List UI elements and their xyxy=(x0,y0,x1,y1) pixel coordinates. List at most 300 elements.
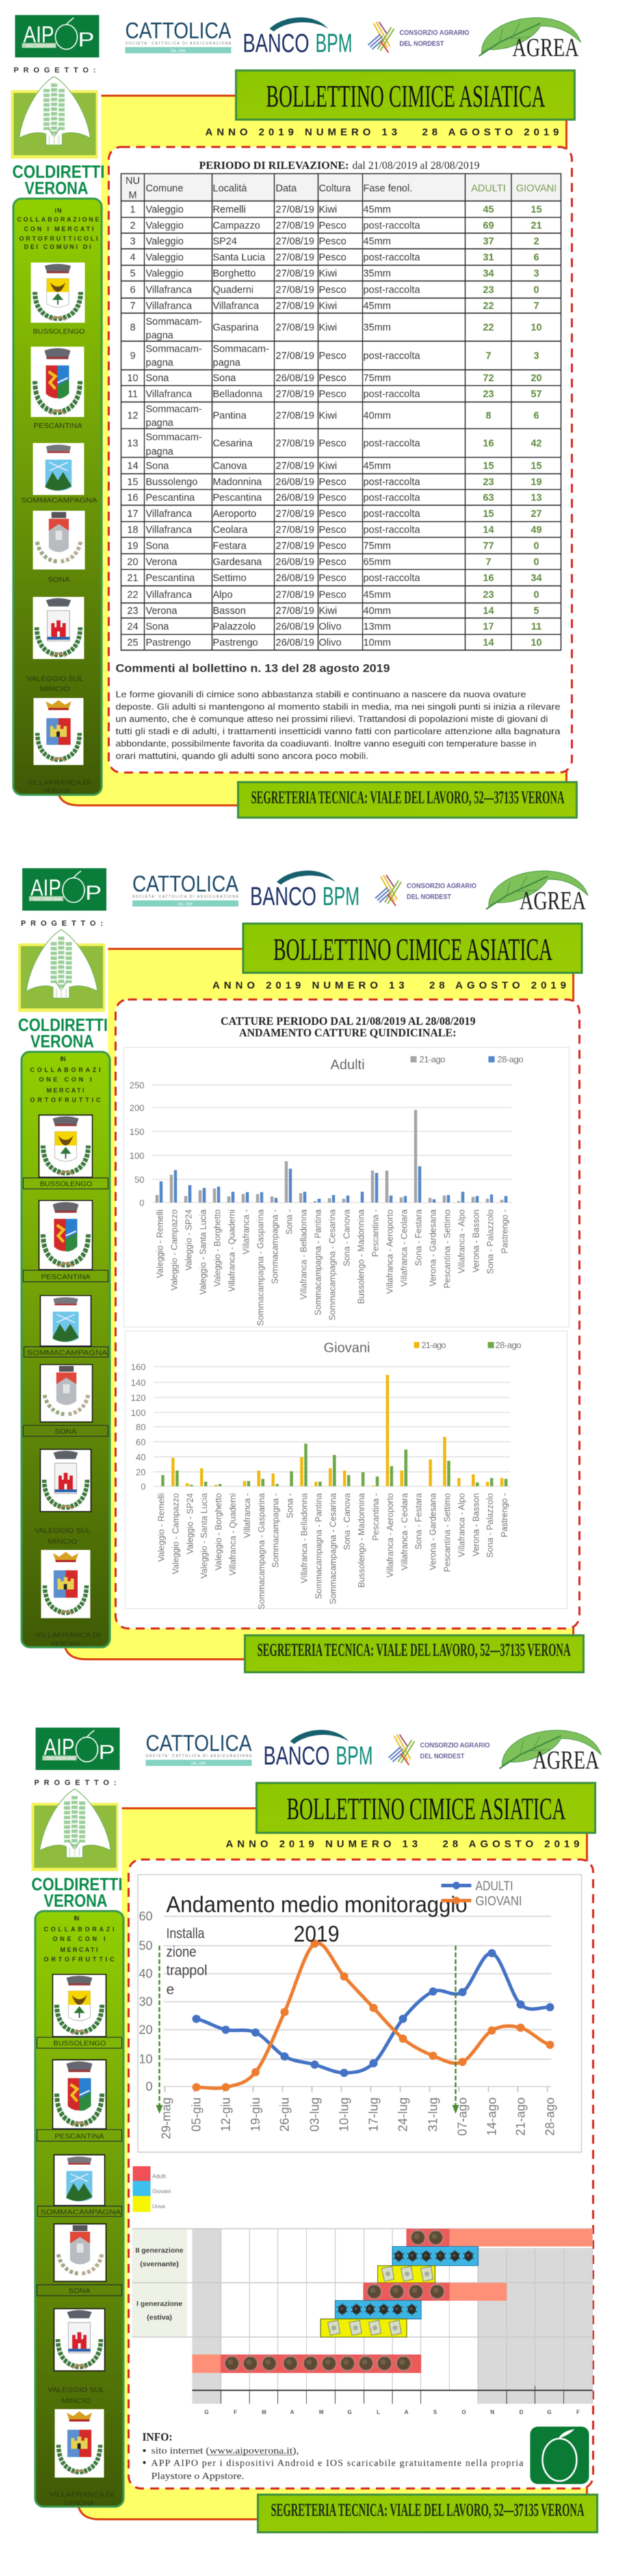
table: monitoring data: Valeggio xyxy=(146,237,183,247)
logo: Consorzio Agrario del Nordest: CONSORZIO AGRARIO xyxy=(400,29,469,37)
logo: Consorzio Agrario del Nordest xyxy=(389,1734,490,1765)
table: monitoring data: Basson xyxy=(213,606,246,617)
sidebar: municipalities: MERCATI xyxy=(60,1946,98,1953)
logo: Agrea: AGREA xyxy=(512,33,579,62)
axis: months: F xyxy=(234,2409,237,2415)
crest: Sona xyxy=(40,1365,92,1422)
table: monitoring data: pagna xyxy=(146,446,174,457)
heading: Coldiretti Verona: VERONA xyxy=(25,178,88,198)
table: monitoring data: 27/08/19 xyxy=(276,323,314,334)
table: monitoring data: 27/08/19 xyxy=(276,525,314,536)
table: monitoring data: Sommacam- xyxy=(213,344,269,355)
logo: AIPO: AIP xyxy=(44,1734,75,1760)
table: monitoring data: 27/08/19 xyxy=(276,351,314,362)
bar chart: adulti: 200 xyxy=(129,1103,144,1113)
label: Villafranca di Verona xyxy=(36,1632,101,1648)
crest: Bussolengo xyxy=(39,1115,92,1177)
bar chart: adulti: Villafranca - Ceolara xyxy=(400,1209,409,1287)
crest: Valeggio sul Mincio xyxy=(33,597,84,659)
table: monitoring data: Ceolara xyxy=(213,525,248,536)
table: monitoring data: 15 xyxy=(127,477,138,488)
panel: yellow background with red border xyxy=(79,1808,587,2519)
table: monitoring data: 27/08/19 xyxy=(276,237,314,247)
table: monitoring data: Alpo xyxy=(213,589,233,600)
table: monitoring data: 16 xyxy=(127,492,138,503)
table: monitoring data: Villafranca xyxy=(146,284,192,295)
table: monitoring data: M xyxy=(129,190,137,201)
label: Sona: SONA xyxy=(68,2287,90,2295)
table: monitoring data: Pesco xyxy=(319,373,346,384)
table heading: dal 21/08/2019 al 28/08/2019 xyxy=(352,160,480,172)
table: monitoring data: 45mm xyxy=(363,301,391,312)
table: monitoring data: 10 xyxy=(127,373,138,384)
table: monitoring data: 26/08/19 xyxy=(276,556,314,567)
title banner xyxy=(236,70,575,120)
table: monitoring data: 27/08/19 xyxy=(276,438,314,449)
annotation: installazione trappole: e xyxy=(166,1982,174,1998)
table: monitoring data: 19 xyxy=(127,541,138,552)
table: monitoring data: 27/08/19 xyxy=(276,606,314,617)
table: monitoring data: Aeroporto xyxy=(213,509,257,520)
table: monitoring data: Kiwi xyxy=(319,410,337,421)
table heading: PERIODO DI RILEVAZIONE: xyxy=(199,160,349,172)
bar chart: giovani: Valeggio - SP24 xyxy=(185,1493,195,1554)
table: monitoring data: 10mm xyxy=(363,637,391,648)
table: monitoring data: 0 xyxy=(534,541,539,552)
label: Sommacampagna xyxy=(24,1347,108,1357)
bar chart: giovani: Verona - Basson xyxy=(471,1493,481,1556)
table: monitoring data: Sona xyxy=(146,461,170,472)
table: monitoring data: 22 xyxy=(483,323,494,334)
table: monitoring data: Kiwi xyxy=(319,268,337,279)
table: monitoring data: post-raccolta xyxy=(363,525,421,536)
label: Villafranca di Verona: VILLAFRANCA DI xyxy=(36,1632,101,1639)
label: Bussolengo: BUSSOLENGO xyxy=(33,328,85,336)
bar chart: adulti: Sommacampagna - xyxy=(270,1209,280,1284)
title banner xyxy=(257,1783,595,1833)
table: monitoring data: post-raccolta xyxy=(363,389,421,400)
bar chart: adulti: Bussolengo - Madonnina xyxy=(356,1209,366,1304)
bar chart: adulti: Villafranca - Alpo xyxy=(457,1209,467,1274)
annotation: installazione trappole: zione xyxy=(166,1944,196,1960)
legend: life stages: Giovani xyxy=(152,2188,171,2195)
heading: Coldiretti Verona: VERONA xyxy=(30,1031,94,1051)
table: monitoring data: 27/08/19 xyxy=(276,284,314,295)
legend: adulti xyxy=(410,1054,523,1064)
sidebar: municipalities: ORTOFRUTTICOLI xyxy=(19,235,98,242)
comments text: un aumento, che è comunque atteso nei prossimi rilievi. Trattandosi di popolazioni miste di giovani di xyxy=(116,714,548,724)
label: Villafranca di Verona xyxy=(49,2491,114,2508)
table: monitoring data: Pesco xyxy=(319,284,346,295)
table: monitoring data: 26/08/19 xyxy=(276,477,314,488)
crest: Pescantina xyxy=(39,1200,92,1270)
table: monitoring data: Sommacam- xyxy=(146,404,202,415)
legend: giovani: 21-ago xyxy=(421,1340,446,1350)
bar chart: adulti: Sommacampagna - Pantina xyxy=(313,1209,323,1315)
info block: Playstore o Appstore. xyxy=(151,2471,244,2482)
logo: Agrea xyxy=(499,1730,601,1775)
bar chart: adulti: Villafranca - Aeroporto xyxy=(385,1209,395,1293)
crest: Pescantina xyxy=(53,2060,106,2129)
logo: Banco BPM: BPM xyxy=(323,883,360,911)
axis: months: D xyxy=(519,2409,523,2415)
label: Bussolengo xyxy=(23,1178,108,1189)
comments text: Le forme giovanili di cimice sono abbastanza stabili e continuano a nascere da nuova ovature xyxy=(116,689,526,699)
bar chart: giovani: 40 xyxy=(136,1452,146,1462)
bar chart: adulti: Sona - Canova xyxy=(342,1209,352,1266)
table: monitoring data: 9 xyxy=(130,351,135,362)
table: monitoring data: 35mm xyxy=(363,323,391,334)
table: monitoring data: Madonnina xyxy=(213,477,263,488)
bar chart: giovani: Sommacampagna - xyxy=(271,1493,280,1568)
table: monitoring data: 42 xyxy=(531,438,542,449)
heading: Coldiretti Verona xyxy=(12,161,105,198)
table: monitoring data: 6 xyxy=(534,410,539,421)
sidebar: municipalities: COLLABORAZIONE xyxy=(17,216,99,223)
row label: I generazione xyxy=(136,2300,183,2322)
table: monitoring data: Pesco xyxy=(319,477,346,488)
sidebar: municipalities: IN xyxy=(74,1915,79,1922)
bar chart: adulti: Pescantina - xyxy=(371,1209,380,1257)
header: logos, title and issue line xyxy=(11,15,581,198)
row label: II generazione: (svernante) xyxy=(140,2260,179,2268)
bar chart: giovani: 120 xyxy=(131,1393,146,1403)
bar chart: adulti: Sona - Palazzolo xyxy=(486,1209,495,1274)
bar chart: giovani: Villafranca - Belladonna xyxy=(300,1493,309,1583)
panel: white dashed box xyxy=(129,1860,593,2488)
logo: AIPO fruit mark xyxy=(530,2427,589,2484)
logo: AIPO: AIP xyxy=(30,875,62,901)
row label: II generazione: II generazione xyxy=(135,2246,183,2255)
table: monitoring data xyxy=(121,174,561,650)
line chart: average monitoring trend xyxy=(138,1875,581,2152)
table: monitoring data: Bussolengo xyxy=(146,477,198,488)
line chart: average monitoring trend: 14-ago xyxy=(485,2097,499,2136)
table: monitoring data: 72 xyxy=(483,373,494,384)
table: monitoring data: Pesco xyxy=(319,237,346,247)
line chart: average monitoring trend: 21-ago xyxy=(514,2097,527,2136)
comments text: deposte. Gli adulti si mantengono al momento stabili in media, ma nei singoli punti si inizia a rilevare xyxy=(116,701,560,712)
table: monitoring data: 3 xyxy=(534,268,539,279)
logo: Agrea: AGREA xyxy=(520,887,586,915)
logo: Cattolica: CATTOLICA xyxy=(146,1730,252,1756)
table: monitoring data: Verona xyxy=(146,556,178,567)
table: monitoring data: Pesco xyxy=(319,438,346,449)
line chart: average monitoring trend: 30 xyxy=(139,1995,153,2009)
bars: I generazione eggs xyxy=(321,2319,407,2337)
axis: months: A xyxy=(290,2409,294,2415)
bar chart: giovani: Sommacampagna - Pantina xyxy=(314,1493,324,1599)
table: monitoring data: 14 xyxy=(127,461,138,472)
logo: Cattolica: SOCIETA' CATTOLICA DI ASSICURAZIONE xyxy=(125,42,232,46)
table: monitoring data: 15 xyxy=(531,204,542,215)
bars: I generazione adults xyxy=(363,2283,507,2300)
table: monitoring data: Fase fenol. xyxy=(363,183,413,194)
table: monitoring data: Villafranca xyxy=(146,589,192,600)
bar chart: adulti: Sommacampagna - Cesarina xyxy=(328,1209,337,1321)
sidebar: municipalities: COLLABORAZI xyxy=(30,1066,101,1073)
logo: Banco BPM xyxy=(243,17,352,58)
logo: Consorzio Agrario del Nordest: CONSORZIO AGRARIO xyxy=(420,1742,490,1749)
table: monitoring data: NU xyxy=(126,176,140,187)
charts heading: ANDAMENTO CATTURE QUINDICINALE: xyxy=(239,1026,456,1039)
logo: Cattolica: CATTOLICA xyxy=(133,871,238,896)
bar chart: giovani: Bussolengo - Madonnina xyxy=(357,1493,367,1587)
table: monitoring data: Quaderni xyxy=(213,284,254,295)
bar chart: adulti: Villafranca - xyxy=(241,1209,251,1255)
bars: overwintering adults xyxy=(192,2354,421,2373)
logo: AIPO: SOC. COOP. AGR. xyxy=(47,1757,75,1761)
table: monitoring data: 31 xyxy=(483,252,494,263)
table: monitoring data: 45mm xyxy=(363,461,391,472)
logo: AIPO: AIP xyxy=(23,22,54,48)
logo: Banco BPM: BPM xyxy=(336,1742,373,1771)
chart title: Andamento medio monitoraggio xyxy=(166,1892,467,1917)
axis: months xyxy=(205,2409,580,2415)
table: monitoring data: Pesco xyxy=(319,389,346,400)
table: monitoring data: Sommacam- xyxy=(146,317,202,327)
table: monitoring data: 4 xyxy=(130,252,135,263)
bar chart: giovani: Valeggio - Borghetto xyxy=(214,1493,224,1570)
table: monitoring data: Remelli xyxy=(213,204,246,215)
table: monitoring data: Pesco xyxy=(319,573,346,584)
table: monitoring data: Data xyxy=(276,183,298,194)
title banner xyxy=(244,924,581,973)
emblem: Coldiretti xyxy=(18,930,105,1012)
table: monitoring data: 26/08/19 xyxy=(276,573,314,584)
table: monitoring data: 6 xyxy=(130,284,135,295)
table: monitoring data: Pesco xyxy=(319,351,346,362)
logo: AIPO: SOC. COOP. AGR. xyxy=(26,44,55,49)
sidebar: municipalities: ORTOFRUTTIC xyxy=(44,1956,115,1963)
label: Pescantina: PESCANTINA xyxy=(55,2133,104,2141)
row label: I generazione: I generazione xyxy=(136,2300,183,2308)
panel: white dashed box xyxy=(109,147,572,773)
label: progetto: PROGETTO: xyxy=(14,66,96,75)
table: monitoring data: 27/08/19 xyxy=(276,589,314,600)
table: monitoring data: 63 xyxy=(483,492,494,503)
legend: adulti and giovani xyxy=(441,1879,522,1909)
panel: yellow background with red border xyxy=(58,96,566,805)
table: monitoring data: 11 xyxy=(127,389,138,400)
section 1: bulletin table page xyxy=(11,15,581,818)
bar chart: giovani: 160 xyxy=(131,1362,146,1372)
table: monitoring data: Pesco xyxy=(319,525,346,536)
table: monitoring data: 26/08/19 xyxy=(276,492,314,503)
table: monitoring data: ADULTI xyxy=(471,183,506,194)
table: monitoring data: Kiwi xyxy=(319,301,337,312)
table: monitoring data: 21 xyxy=(127,573,138,584)
table: monitoring data: Villafranca xyxy=(146,525,192,536)
crest: Bussolengo xyxy=(53,1974,106,2037)
logo: Agrea: AGREA xyxy=(533,1746,599,1775)
table: monitoring data: 27/08/19 xyxy=(276,410,314,421)
table: monitoring data: 69 xyxy=(483,220,494,231)
table: monitoring data: 2 xyxy=(130,220,135,231)
gantt chart: life cycle by generation xyxy=(132,2229,592,2415)
logo: AIPO xyxy=(15,15,99,57)
info block xyxy=(142,2430,524,2482)
table: monitoring data: Gasparina xyxy=(213,323,259,334)
table: monitoring data: 77 xyxy=(483,541,494,552)
table: monitoring data: Sommacam- xyxy=(146,344,202,355)
line chart: average monitoring trend: 0 xyxy=(146,2080,153,2093)
sidebar: municipalities: IN xyxy=(55,207,62,214)
table: monitoring data: Comune xyxy=(146,183,183,194)
bar chart: adulti: Valeggio - Santa Lucia xyxy=(198,1209,208,1295)
bars: II generazione adults xyxy=(406,2229,592,2246)
table: monitoring data: Pescantina xyxy=(213,492,263,503)
label: Sommacampagna xyxy=(38,2206,122,2216)
sidebar: municipalities: MERCATI xyxy=(47,1087,84,1094)
comments text xyxy=(116,689,561,761)
line chart: average monitoring trend: 60 xyxy=(139,1909,153,1923)
table: monitoring data: 10 xyxy=(531,637,542,648)
table: monitoring data: 27/08/19 xyxy=(276,541,314,552)
issue line: ANNO 2019 NUMERO 13 28 AGOSTO 2019 xyxy=(212,980,566,991)
axis: months: O xyxy=(462,2409,466,2415)
bar chart: adulti: Valeggio - Campazzo xyxy=(170,1209,179,1291)
table: monitoring data: 25 xyxy=(127,637,138,648)
table: monitoring data: Kiwi xyxy=(319,204,337,215)
bar chart: adulti: Valeggio - Borghetto xyxy=(213,1209,222,1287)
legend: adulti and giovani: ADULTI xyxy=(475,1879,513,1894)
table: monitoring data: 23 xyxy=(483,284,494,295)
table: monitoring data: Kiwi xyxy=(319,461,337,472)
table: monitoring data: 20 xyxy=(531,373,542,384)
table: monitoring data: Sona xyxy=(146,621,170,632)
sidebar: municipalities: DEI COMUNI DI xyxy=(24,243,91,250)
bar chart: adulti: Sommacampagna - Gasparina xyxy=(256,1209,265,1326)
axis: months: M xyxy=(262,2409,267,2415)
logo: Consorzio Agrario del Nordest: DEL NORDEST xyxy=(400,40,444,48)
table: monitoring data: Olivo xyxy=(319,637,341,648)
comments text: tutti gli stadi e di adulti, i trattamenti insetticidi vanno fatti con particolare attenzione alla bagnatura xyxy=(116,726,561,736)
table: monitoring data: 17 xyxy=(127,509,138,520)
table: monitoring data: 57 xyxy=(531,389,542,400)
table: monitoring data: 26/08/19 xyxy=(276,373,314,384)
table: monitoring data: 34 xyxy=(483,268,494,279)
legend: adulti and giovani: GIOVANI xyxy=(475,1894,522,1909)
comments heading: Commenti al bollettino n. 13 del 28 agosto 2019 xyxy=(116,662,390,675)
header: logos, title and issue line xyxy=(18,868,588,1051)
table: monitoring data: 5 xyxy=(130,268,135,279)
label: progetto: PROGETTO: xyxy=(34,1779,116,1787)
bar chart: adulti: Sona - xyxy=(285,1209,294,1235)
logo: AIPO: P xyxy=(99,1741,115,1764)
table: monitoring data: 75mm xyxy=(363,373,391,384)
table: monitoring data: Palazzolo xyxy=(213,621,256,632)
table: monitoring data: pagna xyxy=(146,358,174,368)
table: monitoring data: Pastrengo xyxy=(146,637,191,648)
table: monitoring data: 26/08/19 xyxy=(276,621,314,632)
crest: Bussolengo xyxy=(31,263,85,323)
table: monitoring data: Cesarina xyxy=(213,438,253,449)
table: monitoring data: 27/08/19 xyxy=(276,220,314,231)
bar chart: giovani: Villafranca - Alpo xyxy=(457,1493,467,1557)
sidebar: municipalities xyxy=(36,1911,123,2508)
table: monitoring data: 8 xyxy=(130,323,135,334)
table: monitoring data: Olivo xyxy=(319,621,341,632)
logo: AIPO: P xyxy=(85,882,101,904)
table: monitoring data: Pastrengo xyxy=(213,637,258,648)
table: monitoring data: Villafranca xyxy=(146,509,192,520)
label: Valeggio sul Mincio: MINCIO xyxy=(48,1538,77,1546)
table: monitoring data: Belladonna xyxy=(213,389,263,400)
table: monitoring data: Sommacam- xyxy=(146,432,202,443)
bar chart: adulti: Valeggio - Remelli xyxy=(155,1209,165,1278)
table: monitoring data: Pantina xyxy=(213,410,247,421)
table: monitoring data: Gardesana xyxy=(213,556,263,567)
crest: Villafranca di Verona xyxy=(34,698,83,765)
bar chart: giovani: Valeggio - Remelli xyxy=(157,1493,166,1562)
axis: months: L xyxy=(377,2409,380,2415)
bar chart: adulti: Pastrengo - xyxy=(500,1209,510,1254)
label: Valeggio sul Mincio xyxy=(34,1527,91,1546)
header: logos, title and issue line xyxy=(31,1728,601,1911)
table: monitoring data: Villafranca xyxy=(213,301,259,312)
table: monitoring data: post-raccolta xyxy=(363,438,421,449)
label: Valeggio sul Mincio: MINCIO xyxy=(62,2398,91,2405)
charts heading: CATTURE PERIODO DAL 21/08/2019 AL 28/08/2019 xyxy=(220,1015,475,1028)
emblem: Coldiretti xyxy=(11,77,98,159)
bar chart: giovani: Villafranca - Aeroporto xyxy=(385,1493,395,1577)
table: monitoring data: Località xyxy=(213,183,248,194)
table: monitoring data: Valeggio xyxy=(146,220,183,231)
bar chart: giovani: Sona - Canova xyxy=(343,1493,352,1550)
bar chart: giovani: 0 xyxy=(141,1481,146,1492)
table: monitoring data: post-raccolta xyxy=(363,252,421,263)
table: monitoring data: 7 xyxy=(486,556,491,567)
table: monitoring data: Pescantina xyxy=(146,492,196,503)
table: monitoring data: Pesco xyxy=(319,509,346,520)
line chart: average monitoring trend: 03-lug xyxy=(308,2097,322,2132)
crest: Valeggio sul Mincio xyxy=(40,1449,91,1512)
table: monitoring data: 0 xyxy=(534,284,539,295)
label: Sommacampagna: SOMMACAMPAGNA xyxy=(40,2209,121,2216)
table: monitoring data: Festara xyxy=(213,541,247,552)
sidebar: municipalities: ONE CON I xyxy=(39,1076,92,1083)
table: monitoring data: 16 xyxy=(483,573,494,584)
table: monitoring data: 16 xyxy=(483,438,494,449)
bar chart: adulti: Pescantina - Settimo xyxy=(443,1209,452,1288)
table: monitoring data: 15 xyxy=(483,509,494,520)
bar chart: adulti xyxy=(124,1047,569,1327)
label: Valeggio sul Mincio xyxy=(27,675,83,693)
bar chart: giovani: Pescantina - Settimo xyxy=(443,1493,452,1572)
table: monitoring data: 19 xyxy=(531,477,542,488)
logo: Cattolica: DAL 1896 xyxy=(191,1762,206,1766)
table: monitoring data: 22 xyxy=(127,589,138,600)
table: monitoring data: 27/08/19 xyxy=(276,389,314,400)
crest: Pescantina xyxy=(31,347,84,417)
logo: Cattolica: CATTOLICA xyxy=(125,18,231,43)
table: monitoring data: 40mm xyxy=(363,410,391,421)
table: monitoring data: 14 xyxy=(483,637,494,648)
line chart: average monitoring trend: 20 xyxy=(139,2023,153,2037)
table: monitoring data: 5 xyxy=(534,606,539,617)
panel: yellow background with red border xyxy=(65,949,573,1659)
table: monitoring data: post-raccolta xyxy=(363,492,421,503)
table: monitoring data: Verona xyxy=(146,606,178,617)
table: monitoring data: pagna xyxy=(213,358,241,368)
label: Valeggio sul Mincio: VALEGGIO SUL xyxy=(27,675,83,683)
table: monitoring data: Settimo xyxy=(213,573,246,584)
line chart: average monitoring trend: 24-lug xyxy=(396,2097,410,2132)
table: monitoring data: 17 xyxy=(483,621,494,632)
table: monitoring data: 11 xyxy=(531,621,542,632)
label: Sona xyxy=(23,1425,108,1436)
